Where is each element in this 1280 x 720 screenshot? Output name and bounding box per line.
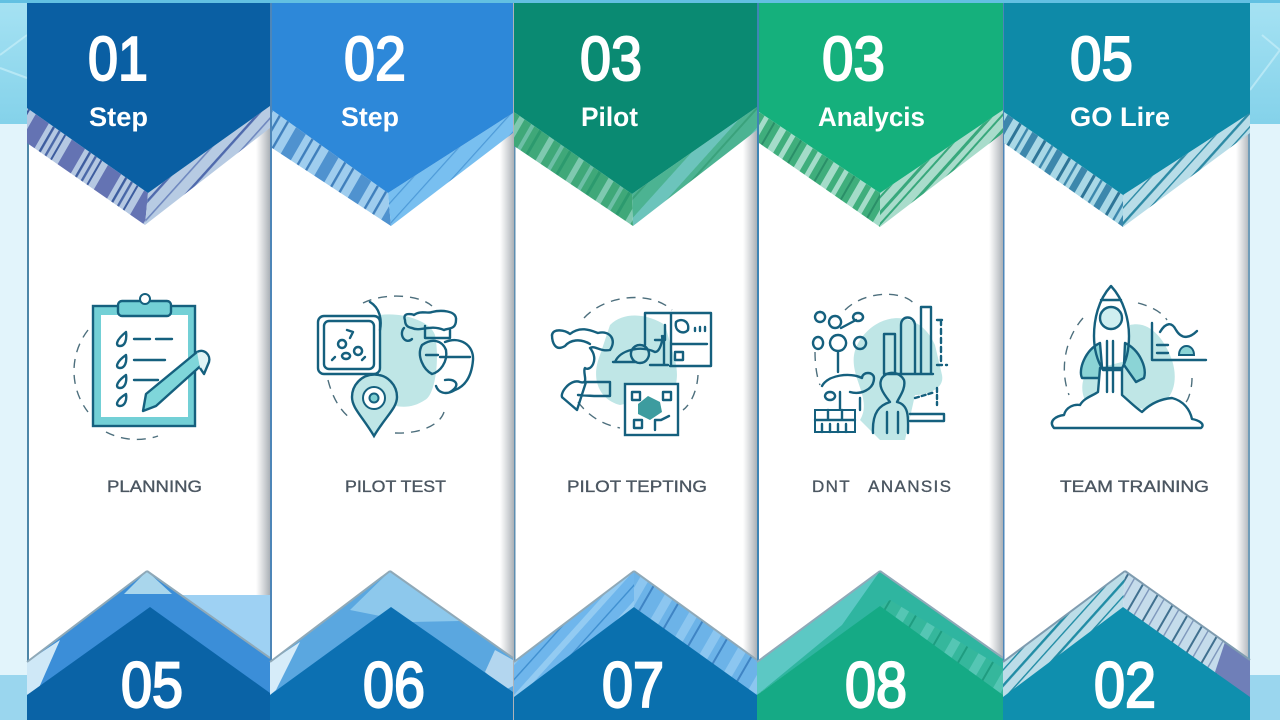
caption data analysis: DNT ANANSIS xyxy=(812,477,951,496)
number 07 bottom: 07 xyxy=(602,649,664,720)
footer chevron 06 xyxy=(270,571,513,720)
header chevron 01 xyxy=(27,3,270,225)
panel: step 02 pilot test xyxy=(270,3,514,720)
number 03: 03 xyxy=(822,25,885,94)
header chevron 03 xyxy=(514,3,757,226)
icon: clipboard and pen xyxy=(74,294,209,439)
caption pilot test: PILOT TEST xyxy=(345,477,446,496)
number 06 bottom: 06 xyxy=(363,649,425,720)
number 05 bottom: 05 xyxy=(121,649,183,720)
footer chevron 08 xyxy=(757,571,1003,720)
icon: rocket launch xyxy=(1052,286,1206,428)
header chevron 05 xyxy=(1004,3,1250,227)
number 08 bottom: 08 xyxy=(845,649,907,720)
header chevron 02 xyxy=(272,3,513,226)
label step: Step xyxy=(341,102,399,132)
number 02: 02 xyxy=(344,25,406,94)
label analysis: Analycis xyxy=(818,102,925,132)
number 05: 05 xyxy=(1070,25,1133,94)
label pilot: Pilot xyxy=(581,102,638,132)
panel: step 03 pilot testing xyxy=(514,3,757,720)
label step: Step xyxy=(89,102,148,132)
number 02 bottom: 02 xyxy=(1094,649,1156,720)
icon: map pin and faces xyxy=(318,296,473,436)
header chevron 04 xyxy=(759,3,1003,227)
number 01: 01 xyxy=(88,25,148,94)
panel: step 04 data analysis xyxy=(757,3,1003,720)
icon: data analysis xyxy=(813,294,947,440)
footer chevron 02 xyxy=(1003,571,1250,720)
panel: step 05 team training xyxy=(1003,3,1250,720)
footer chevron 05 xyxy=(27,571,270,720)
caption pilot testing: PILOT TEPTING xyxy=(567,477,707,496)
footer chevron 07 xyxy=(514,571,757,720)
icon: floor plan and map xyxy=(552,298,711,435)
number 03: 03 xyxy=(580,25,642,94)
label go live: GO Lire xyxy=(1070,102,1170,132)
panel: step 01 planning xyxy=(27,3,270,720)
caption team training: TEAM TRAINING xyxy=(1060,477,1209,496)
caption planning: PLANNING xyxy=(107,477,202,496)
